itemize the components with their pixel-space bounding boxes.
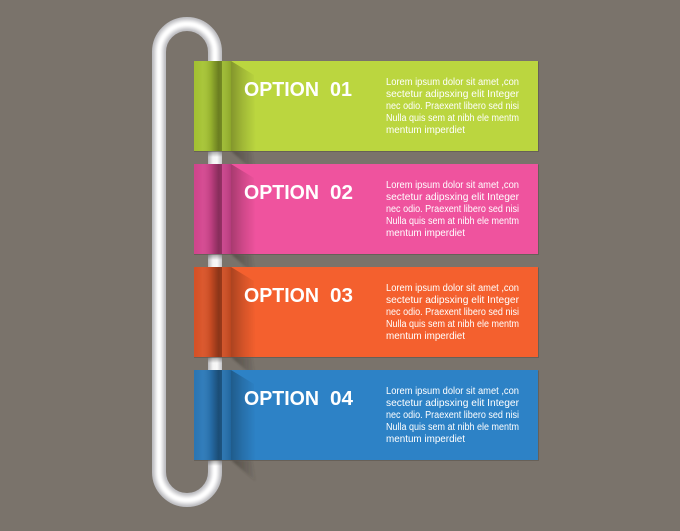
ribbon edge 01 [194, 62, 538, 152]
crease shade 03 [222, 267, 231, 357]
ribbon edge 02 [194, 164, 538, 254]
body text 01: Nulla quis sem at nibh ele mentm [386, 113, 519, 124]
fold band 04 [194, 370, 222, 460]
body text 04: Lorem ipsum dolor sit amet ,con [386, 386, 519, 397]
body text 03: sectetur adipsxing elit Integer [386, 295, 520, 306]
tube contact shadow 01 [208, 151, 222, 157]
body text 03: nec odio. Praexent libero sed nisi [386, 307, 519, 318]
body text 04: Nulla quis sem at nibh ele mentm [386, 422, 519, 433]
ribbon 02 [194, 164, 538, 254]
fold shadow 02 [231, 164, 256, 254]
fold shadow 04 [231, 370, 256, 460]
crease shade 04 [222, 370, 231, 460]
heading 01: 01 [330, 79, 352, 101]
body text 04: nec odio. Praexent libero sed nisi [386, 410, 519, 421]
body text 02: Lorem ipsum dolor sit amet ,con [386, 180, 519, 191]
ribbon 01 [194, 61, 538, 151]
body text 01: nec odio. Praexent libero sed nisi [386, 101, 519, 112]
cast shadow 04 [231, 460, 256, 482]
heading 01: OPTION [244, 79, 319, 101]
body text 02: nec odio. Praexent libero sed nisi [386, 204, 519, 215]
body text 04: sectetur adipsxing elit Integer [386, 398, 520, 409]
cast shadow 03 [231, 357, 256, 379]
heading 04: 04 [330, 388, 354, 410]
body text 03: Lorem ipsum dolor sit amet ,con [386, 283, 519, 294]
fold highlight 02 [194, 164, 222, 254]
panel: option 03 [194, 267, 538, 379]
fold band 03 [194, 267, 222, 357]
fold crease 01 [222, 61, 231, 151]
panel: option 04 [194, 370, 538, 482]
heading 03: 03 [330, 285, 353, 307]
heading 02: 02 [330, 182, 353, 204]
panel: option 02 [194, 164, 538, 276]
fold highlight 04 [194, 370, 222, 460]
body text 01: Lorem ipsum dolor sit amet ,con [386, 77, 519, 88]
heading 02: OPTION [244, 182, 319, 204]
cast shadow 01 [231, 151, 256, 173]
fold crease 02 [222, 164, 231, 254]
ribbon 03 [194, 267, 538, 357]
fold band 01 [194, 61, 222, 151]
body text 01: mentum imperdiet [386, 125, 465, 136]
body text 04: mentum imperdiet [386, 434, 465, 445]
heading 03: OPTION [244, 285, 319, 307]
body text 02: mentum imperdiet [386, 228, 465, 239]
crease shade 02 [222, 164, 231, 254]
ribbon edge 03 [194, 268, 538, 358]
ribbon 04 [194, 370, 538, 460]
cast shadow 02 [231, 254, 256, 276]
fold crease 03 [222, 267, 231, 357]
fold band 02 [194, 164, 222, 254]
ribbon edge 04 [194, 370, 538, 460]
body text 03: Nulla quis sem at nibh ele mentm [386, 319, 519, 330]
loop tube [159, 24, 222, 500]
fold shadow 03 [231, 267, 256, 357]
body text 02: sectetur adipsxing elit Integer [386, 192, 520, 203]
tube contact shadow 04 [208, 460, 222, 466]
tube contact shadow 03 [208, 357, 222, 363]
fold highlight 03 [194, 267, 222, 357]
panel: option 01 [194, 61, 538, 173]
body text 02: Nulla quis sem at nibh ele mentm [386, 216, 519, 227]
heading 04: OPTION [244, 388, 319, 410]
tube gaps [208, 150, 222, 371]
body text 03: mentum imperdiet [386, 331, 465, 342]
fold crease 04 [222, 370, 231, 460]
fold highlight 01 [194, 61, 222, 151]
body text 01: sectetur adipsxing elit Integer [386, 89, 520, 100]
tube contact shadow 02 [208, 254, 222, 260]
fold shadow 01 [231, 61, 256, 151]
crease shade 01 [222, 61, 231, 151]
